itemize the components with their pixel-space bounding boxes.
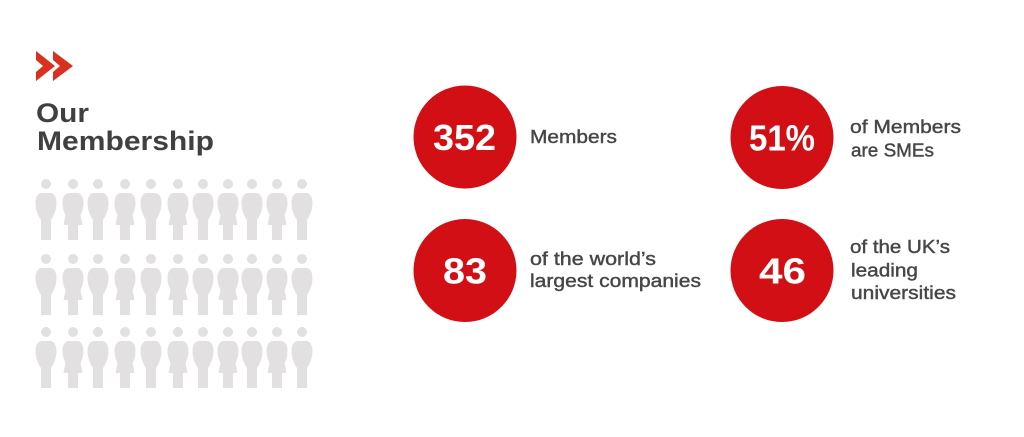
stat: 51% of members are SMEs bbox=[730, 86, 961, 189]
stat: 83 of the world's largest companies bbox=[414, 219, 701, 322]
stat: 352 members: Members bbox=[530, 127, 617, 147]
stat: 46 of the UK's leading universities: universities bbox=[851, 283, 956, 303]
stat: 352 members bbox=[414, 86, 617, 188]
stat: 352 members: 352 bbox=[433, 117, 496, 158]
stat: 51% of members are SMEs: are SMEs bbox=[851, 140, 934, 160]
stat: 83 of the world's largest companies: largest companies bbox=[530, 271, 701, 291]
title bbox=[36, 98, 214, 156]
pictogram: members bbox=[36, 179, 312, 388]
pictogram row 3 bbox=[36, 327, 312, 388]
stat: 83 of the world's largest companies: 83 bbox=[443, 250, 487, 292]
pictogram row 2 bbox=[36, 254, 312, 315]
stat: 46 of the UK's leading universities: 46 bbox=[759, 250, 806, 292]
icon: double chevron bbox=[36, 51, 73, 81]
title: Our bbox=[36, 98, 90, 128]
stat: 51% of members are SMEs: 51% bbox=[749, 118, 815, 158]
stat: 46 of the UK's leading universities: leading bbox=[851, 260, 918, 280]
stat: 51% of members are SMEs: of Members bbox=[850, 117, 961, 137]
stat: 46 of the UK's leading universities: of the UK’s bbox=[850, 237, 950, 257]
pictogram row 1 bbox=[36, 179, 312, 240]
stat: 46 of the UK's leading universities bbox=[730, 219, 956, 322]
stat: 83 of the world's largest companies: of the world’s bbox=[530, 249, 656, 269]
title: Membership bbox=[37, 126, 214, 156]
